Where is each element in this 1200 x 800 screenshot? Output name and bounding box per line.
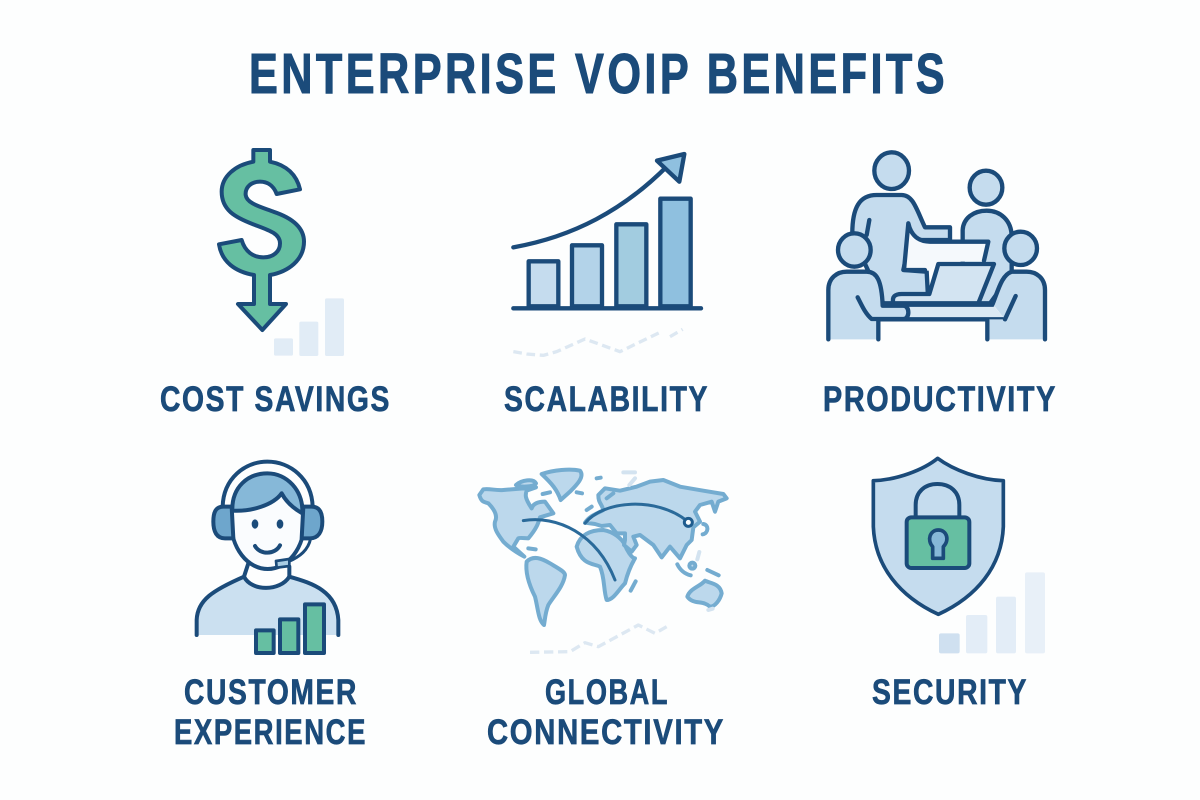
title: ENTERPRISE VOIP BENEFITS <box>249 42 948 106</box>
label: global connectivity: GLOBAL <box>545 673 669 712</box>
panel: global connectivity <box>479 470 727 752</box>
label: customer experience: EXPERIENCE <box>174 713 367 752</box>
panel: customer experience <box>174 462 367 752</box>
panel: cost savings <box>160 150 391 419</box>
icon: rising bar chart with arrow <box>513 154 701 355</box>
label: productivity: PRODUCTIVITY <box>823 380 1057 419</box>
panel: security <box>872 458 1045 712</box>
label: global connectivity: CONNECTIVITY <box>487 713 725 752</box>
icon: team meeting around a table <box>828 152 1045 339</box>
panel: productivity <box>823 152 1057 419</box>
icon: world map with connection arcs <box>479 470 727 652</box>
icon: support agent with headset and bars <box>197 462 338 653</box>
panel: scalability <box>504 154 709 419</box>
label: security: SECURITY <box>872 673 1028 712</box>
icon: dollar sign with down arrow and faint bars <box>219 150 344 356</box>
label: cost savings: COST SAVINGS <box>160 380 391 419</box>
label: customer experience: CUSTOMER <box>184 673 358 712</box>
label: scalability: SCALABILITY <box>504 380 709 419</box>
icon: shield with padlock and faint bars <box>873 458 1045 653</box>
